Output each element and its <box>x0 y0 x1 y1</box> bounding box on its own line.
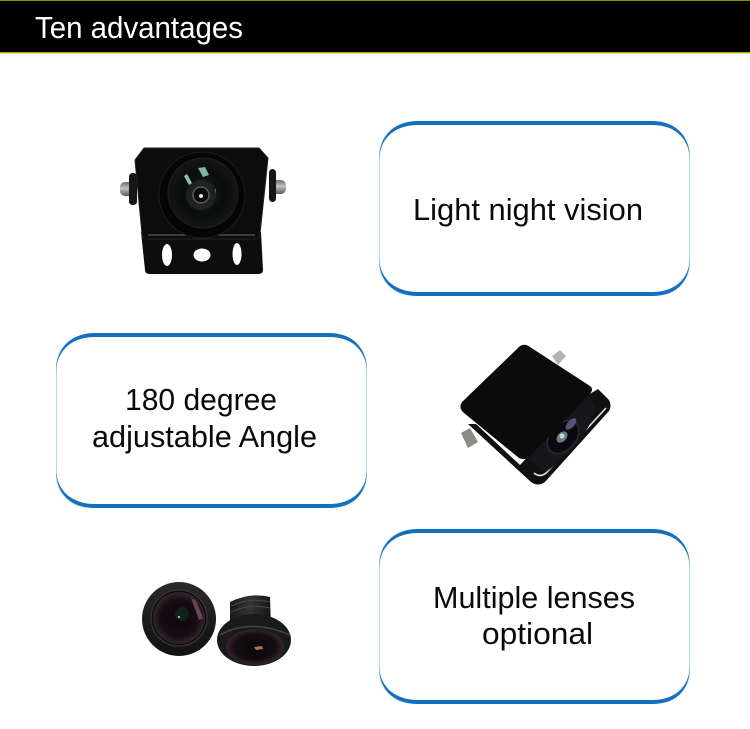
bracket <box>141 232 263 274</box>
label: Multiple lenses <box>433 580 635 615</box>
panel: multiple lenses optional <box>379 529 690 704</box>
photo: front view of camera <box>120 148 286 274</box>
label: optional <box>482 616 593 651</box>
mounting slots <box>162 244 172 266</box>
label: 180 degree <box>125 382 277 417</box>
body <box>135 148 268 239</box>
label: Light night vision <box>413 192 643 227</box>
label: adjustable Angle <box>92 419 317 454</box>
body <box>460 345 592 459</box>
label <box>92 382 317 454</box>
bracket <box>468 389 610 484</box>
photo: angled view of camera <box>460 345 610 484</box>
header bar <box>0 0 750 53</box>
left lens <box>142 582 216 656</box>
lens <box>159 152 245 238</box>
panel: light night vision <box>379 121 690 296</box>
title: Ten advantages <box>35 10 243 45</box>
lens face <box>526 390 596 472</box>
right lens <box>217 595 291 666</box>
panel: 180 degree adjustable angle <box>56 333 367 508</box>
screws <box>120 182 135 196</box>
screws <box>552 350 566 365</box>
bracket highlight <box>534 408 606 476</box>
label <box>433 580 635 651</box>
photo: two lenses <box>142 582 291 666</box>
